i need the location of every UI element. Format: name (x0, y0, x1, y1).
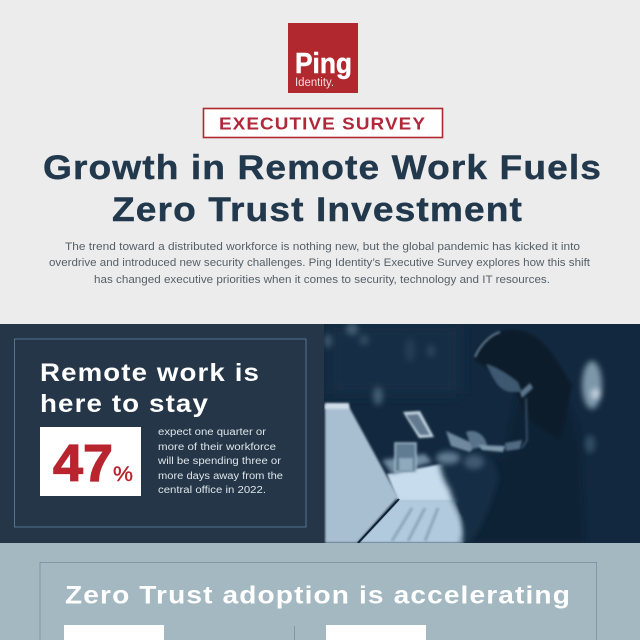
intro text: The trend toward a distributed workforce is nothing new, but the global pandemic has kicked it into (65, 241, 580, 253)
logo: Ping Identity (288, 23, 358, 93)
intro text (49, 241, 590, 286)
woman's body (463, 384, 585, 543)
stat description: more days away from the (158, 471, 284, 482)
logo: Ping Identity: Identity. (295, 77, 334, 89)
stat: 47% (40, 427, 141, 496)
photo: woman working on laptop and tablet at night (324, 323, 640, 543)
stat description: will be spending three or (157, 456, 282, 467)
heading: remote work is here to stay (40, 359, 260, 418)
heading: remote work is here to stay: Remote work is (40, 359, 260, 387)
necklace (522, 398, 527, 448)
title: Zero Trust Investment (112, 191, 523, 229)
intro text: has changed executive priorities when it comes to security, technology and IT resources. (94, 274, 550, 286)
glass (395, 443, 416, 472)
stat description: more of their workforce (158, 442, 277, 453)
stat description: expect one quarter or (158, 427, 267, 438)
heading: remote work is here to stay: here to stay (40, 390, 209, 418)
panel: zero trust adoption (0, 543, 640, 640)
heading: zero trust adoption: Zero Trust adoption is accelerating (65, 582, 571, 610)
stat description: central office in 2022. (158, 485, 266, 496)
stat box left (64, 625, 164, 640)
laptop keyboard (358, 500, 471, 543)
logo: Ping Identity: Ping (295, 48, 352, 80)
foreground hand blur (440, 449, 498, 543)
stat: 47%: 47 (53, 435, 113, 493)
hair (474, 330, 572, 440)
stat box right (326, 625, 426, 640)
stat description (157, 427, 284, 496)
header background (0, 0, 640, 324)
badge: executive survey (204, 108, 442, 138)
intro text: overdrive and introduced new security challenges. Ping Identity’s Executive Survey explores how this shift (49, 257, 590, 269)
title: Growth in Remote Work Fuels (43, 149, 602, 187)
face (486, 364, 522, 392)
badge: executive survey: EXECUTIVE SURVEY (219, 114, 426, 134)
stat: 47%: % (113, 463, 133, 486)
panel: remote work (0, 324, 324, 543)
title (43, 149, 602, 229)
laptop screen (325, 405, 398, 543)
desk (387, 462, 462, 502)
phone and hands (446, 431, 522, 452)
tablet stand (403, 411, 434, 438)
